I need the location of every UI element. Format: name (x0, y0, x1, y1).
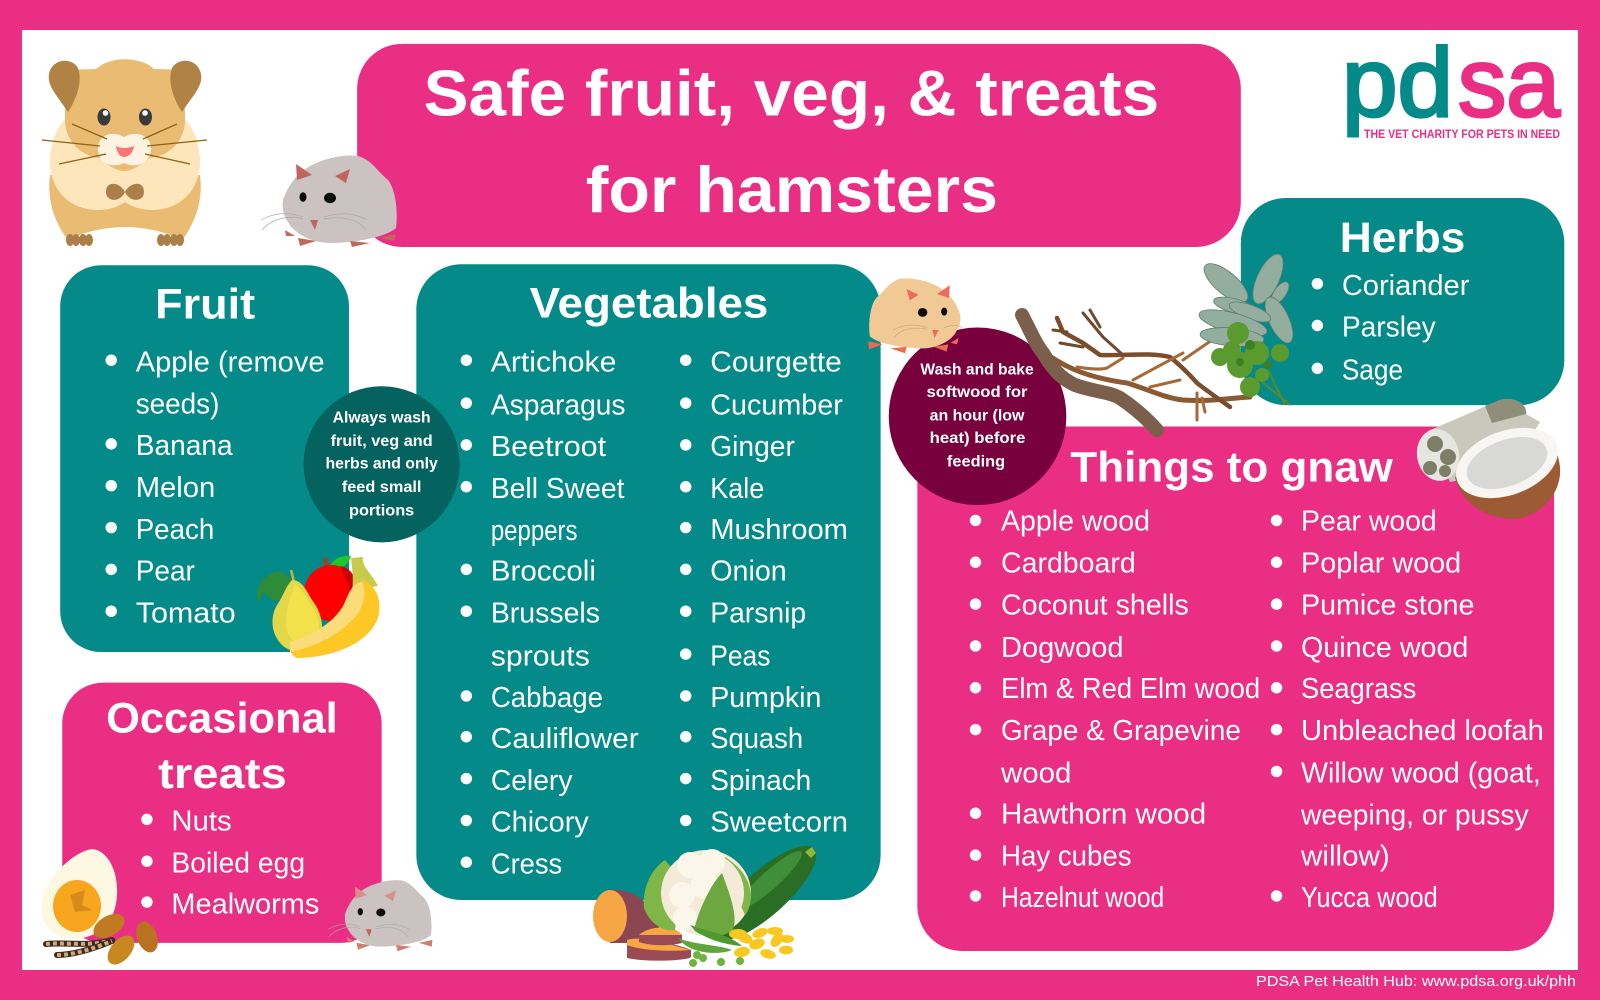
list: gnaw column 1: Hay cubes (1001, 840, 1132, 872)
list: fruit: Banana (136, 430, 233, 462)
list: gnaw column 2: Pear wood (1301, 506, 1437, 538)
list: vegetables column 1: Chicory (491, 807, 589, 839)
icon: treats group (42, 849, 162, 969)
list: herbs: Parsley (1342, 312, 1436, 344)
list: gnaw column 1: Cardboard (1001, 547, 1136, 579)
list: fruit: Peach (136, 514, 214, 546)
icon: grey hamster on title (261, 155, 397, 247)
callout: wash and bake softwood (889, 328, 1066, 505)
list: vegetables column 2: Spinach (710, 765, 811, 797)
list: vegetables column 2: Sweetcorn (710, 807, 848, 839)
callout: wash and bake softwood: feeding (947, 453, 1005, 470)
heading: occasional treats: treats (158, 750, 287, 798)
callout: wash and bake softwood: heat) before (930, 430, 1026, 447)
heading: occasional treats (106, 695, 338, 798)
list: gnaw column 2: Yucca wood (1301, 882, 1438, 914)
heading: fruit: Fruit (155, 280, 255, 328)
callout: always wash (304, 386, 460, 542)
list: fruit: Tomato (136, 597, 236, 629)
list: vegetables column 2: Kale (710, 473, 764, 505)
list: gnaw column 2: Poplar wood (1301, 547, 1461, 579)
list: gnaw column 1: Hawthorn wood (1001, 798, 1206, 830)
icon: grey hamster by treats (328, 880, 432, 951)
list: gnaw column 2: Unbleached loofah (1301, 715, 1544, 747)
logo: pdsa: pd (1342, 28, 1453, 137)
list: gnaw column 1: Hazelnut wood (1001, 882, 1164, 914)
list: vegetables column 1: Brussels (491, 597, 600, 629)
callout: always wash: herbs and only (326, 455, 438, 472)
list: vegetables column 2: Onion (710, 556, 787, 588)
panel: herbs (1241, 198, 1564, 405)
list: gnaw column 1: Grape & Grapevine (1001, 715, 1241, 747)
list: vegetables column 1: peppers (491, 515, 578, 547)
list: occasional treats: Mealworms (171, 888, 319, 920)
title line 2: for hamsters (586, 153, 998, 226)
list: vegetables column 1 (461, 346, 639, 880)
list: vegetables column 2: Peas (710, 640, 770, 672)
list: vegetables column 1: Cabbage (491, 682, 603, 714)
list: vegetables column 1: Beetroot (491, 431, 606, 463)
list: vegetables column 1: Asparagus (491, 389, 626, 421)
icon: herb bunch (1197, 250, 1299, 405)
logo tagline: THE VET CHARITY FOR PETS IN NEED (1364, 129, 1560, 141)
list: gnaw column 2: weeping, or pussy (1300, 799, 1529, 831)
footer credit: PDSA Pet Health Hub: www.pdsa.org.uk/phh (1256, 973, 1576, 990)
panel: occasional treats (62, 683, 382, 943)
list: occasional treats: Nuts (171, 806, 232, 838)
callout: wash and bake softwood: softwood for (927, 384, 1028, 401)
list: vegetables column 2 (680, 346, 848, 839)
list: vegetables column 2: Ginger (710, 431, 795, 463)
title banner (357, 44, 1241, 247)
list: gnaw column 2: Quince wood (1301, 632, 1468, 664)
panel: fruit (60, 265, 349, 652)
list: gnaw column 1: Coconut shells (1001, 589, 1189, 621)
panel: vegetables (416, 264, 881, 900)
icon: large cartoon hamster (42, 59, 207, 250)
icon: vegetable group (593, 832, 829, 967)
icon: peach hamster on callout (868, 278, 963, 353)
heading: herbs: Herbs (1340, 214, 1465, 262)
list: gnaw column 1 (970, 506, 1260, 914)
list: vegetables column 1: Cress (491, 848, 562, 880)
list: vegetables column 1: sprouts (491, 640, 590, 672)
logo: pdsa (1342, 28, 1560, 141)
icon: softwood branch (1022, 310, 1250, 430)
list: vegetables column 2: Parsnip (710, 597, 806, 629)
list: vegetables column 1: Bell Sweet (491, 473, 624, 505)
panel: things to gnaw (917, 427, 1554, 951)
list: herbs: Sage (1342, 355, 1403, 387)
list: fruit: seeds) (136, 388, 219, 420)
callout: always wash: fruit, veg and (331, 433, 433, 450)
list: vegetables column 2: Courgette (710, 346, 842, 378)
heading: things to gnaw: Things to gnaw (1070, 444, 1394, 492)
title line 1: Safe fruit, veg, & treats (423, 56, 1159, 129)
list: vegetables column 1: Celery (491, 765, 573, 797)
heading: vegetables: Vegetables (530, 279, 768, 327)
callout: wash and bake softwood: an hour (low (930, 407, 1025, 424)
list: fruit (106, 346, 324, 629)
list: vegetables column 2: Squash (710, 723, 803, 755)
callout: wash and bake softwood: Wash and bake (920, 361, 1034, 378)
list: herbs (1312, 270, 1470, 387)
list: fruit: Apple (remove (136, 346, 324, 378)
callout: always wash: Always wash (333, 409, 431, 426)
list: gnaw column 1: Dogwood (1001, 632, 1123, 664)
callout: always wash: portions (349, 502, 414, 519)
list: vegetables column 1: Artichoke (491, 346, 616, 378)
list: gnaw column 1: Apple wood (1001, 506, 1150, 538)
list: occasional treats: Boiled egg (171, 847, 305, 879)
list: gnaw column 1: wood (1000, 758, 1071, 790)
list: vegetables column 2: Cucumber (710, 389, 843, 421)
list: gnaw column 1: Elm & Red Elm wood (1001, 673, 1260, 705)
heading: occasional treats: Occasional (106, 695, 338, 743)
list: gnaw column 2: Seagrass (1301, 673, 1416, 705)
list: fruit: Pear (136, 556, 195, 588)
logo: pdsa: sa (1458, 28, 1560, 137)
list: gnaw column 2: Pumice stone (1301, 589, 1474, 621)
list: gnaw column 2: Willow wood (goat, (1301, 758, 1541, 790)
list: vegetables column 2: Pumpkin (710, 682, 821, 714)
list: occasional treats (141, 806, 319, 920)
list: gnaw column 2: willow) (1300, 840, 1390, 872)
list: herbs: Coriander (1342, 270, 1470, 302)
list: gnaw column 2 (1271, 506, 1544, 914)
list: vegetables column 1: Cauliflower (491, 723, 639, 755)
callout: always wash: feed small (342, 479, 421, 496)
icon: fruit group (257, 556, 379, 658)
list: vegetables column 1: Broccoli (491, 556, 596, 588)
list: vegetables column 2: Mushroom (710, 514, 848, 546)
icon: loofah and coconut (1413, 399, 1568, 519)
list: fruit: Melon (136, 472, 215, 504)
